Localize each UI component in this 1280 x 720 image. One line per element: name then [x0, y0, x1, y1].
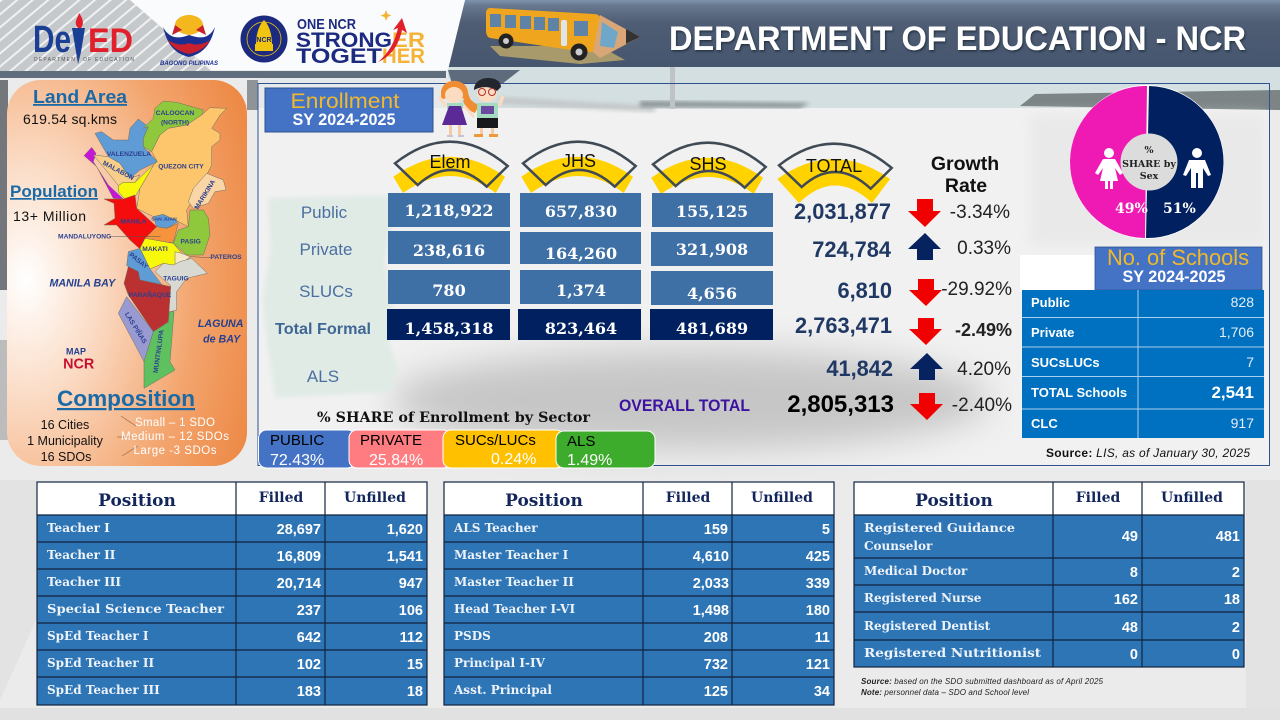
pie chart: share by sex: 49% [1115, 201, 1148, 217]
map labels: de BAY [203, 334, 241, 346]
logo: One NCR Stronger Together: STRONG [296, 29, 392, 52]
source note: schools: Source: LIS, as of January 30, 2025 [1046, 446, 1250, 460]
panel: number of schools [1020, 245, 1264, 438]
table: master teachers and school heads: 208 [704, 630, 728, 646]
table: health and guidance positions: Position [915, 491, 993, 511]
map labels: MAP [66, 346, 86, 356]
pie chart: share by sex: % [1144, 145, 1154, 156]
growth rate heading [931, 153, 999, 197]
overall total label: OVERALL TOTAL [619, 396, 750, 415]
table: teacher positions: Teacher II [47, 548, 116, 562]
enrollment totals: 41,842 [826, 356, 893, 381]
table: master teachers and school heads: 2,033 [693, 576, 729, 592]
table: teacher positions: 18 [407, 684, 423, 700]
table: teacher positions: Unfilled [344, 490, 406, 506]
map labels: TAGUIG [163, 275, 189, 282]
table: master teachers and school heads: 1,498 [693, 603, 729, 619]
table: teacher positions [37, 482, 427, 705]
enrollment totals [794, 199, 893, 381]
growth rate heading: Growth [931, 153, 999, 175]
enrollment table: Elem column: 780 [432, 281, 466, 300]
enrollment totals: 724,784 [812, 237, 891, 262]
header banner [0, 0, 1280, 78]
enrollment table: JHS column: 657,830 [545, 202, 617, 221]
enrollment table: SHS column: 155,125 [676, 202, 748, 221]
table: master teachers and school heads: 5 [822, 522, 830, 538]
column heading: SHS [651, 143, 766, 194]
table: teacher positions: 947 [399, 576, 423, 592]
table: master teachers and school heads: 180 [806, 603, 830, 619]
share of enrollment bar: PRIVATE [360, 432, 422, 449]
enrollment table: Elem column: 1,458,318 [404, 319, 494, 338]
table: health and guidance positions: Registered Guidance [864, 521, 1015, 535]
map labels: MALABON [101, 160, 135, 182]
panel: number of schools: 917 [1231, 415, 1254, 431]
enrollment table: Elem column [387, 193, 510, 340]
table: master teachers and school heads: 4,610 [693, 549, 729, 565]
map labels: CALOOCAN [156, 110, 194, 117]
logo: One NCR Stronger Together: TOGET [296, 45, 382, 68]
table: teacher positions: 642 [297, 630, 321, 646]
map labels: LAS PIÑAS [123, 310, 150, 346]
table: health and guidance positions: 8 [1130, 565, 1138, 581]
panel: enrollment heading: Enrollment [290, 90, 400, 113]
table: master teachers and school heads: 159 [704, 522, 728, 538]
enrollment table: Elem column: 1,218,922 [404, 201, 494, 220]
composition counts: 16 Cities [41, 418, 89, 432]
table: master teachers and school heads: 121 [806, 657, 830, 673]
enrollment table: SHS column: 321,908 [676, 240, 748, 259]
enrollment table: JHS column [518, 193, 641, 340]
pie chart: share by sex: SHARE by [1122, 159, 1176, 170]
panel: number of schools: Public [1031, 295, 1070, 310]
land area heading: Land Area [33, 87, 128, 107]
table: master teachers and school heads: PSDS [454, 629, 491, 643]
pie chart: share by sex [1070, 85, 1224, 239]
composition heading: Composition [57, 386, 195, 411]
growth arrows [908, 199, 943, 420]
map labels: PASAY [128, 252, 149, 271]
SDO size classes [117, 416, 229, 457]
logo: DepED [33, 13, 134, 64]
panel: number of schools: Private [1031, 325, 1074, 340]
icon: pencil school bus [486, 8, 640, 64]
table: teacher positions: Teacher III [47, 575, 121, 589]
share of enrollment bar: 25.84% [369, 452, 423, 469]
growth rates: -3.34% [950, 202, 1010, 223]
pie chart: share by sex: 51% [1163, 201, 1196, 217]
icon: female [1095, 148, 1123, 189]
map labels: MANDALUYONG [58, 233, 111, 240]
growth rate heading: Rate [945, 175, 987, 197]
table: teacher positions: Filled [259, 490, 304, 506]
logo: One NCR Stronger Together: HER [382, 45, 425, 68]
logo: DepED: DEPARTMENT OF EDUCATION [34, 57, 134, 63]
panel: number of schools: TOTAL Schools [1031, 385, 1127, 400]
table: master teachers and school heads: Master Teacher I [454, 548, 569, 562]
panel: number of schools: 1,706 [1219, 324, 1254, 340]
map labels: PASIG [181, 238, 201, 245]
panel: number of schools: 2,541 [1211, 383, 1254, 402]
table: master teachers and school heads: Master Teacher II [454, 575, 574, 589]
map labels [49, 110, 243, 373]
enrollment table: JHS column: 1,374 [556, 281, 606, 300]
table: teacher positions: SpEd Teacher III [47, 683, 160, 697]
growth rates [941, 202, 1012, 416]
share of enrollment heading: % SHARE of Enrollment by Sector [317, 410, 591, 426]
table: master teachers and school heads: Asst. Principal [453, 683, 552, 697]
table: teacher positions: 1,541 [387, 549, 423, 565]
SDO size classes: Medium – 12 SDOs [121, 431, 229, 443]
table: health and guidance positions: 2 [1232, 565, 1240, 581]
table: health and guidance positions: Registered Dentist [864, 619, 991, 633]
map labels: MUNTINLUPA [153, 329, 166, 373]
table: master teachers and school heads: 11 [815, 630, 830, 646]
source note: personnel: Note: personnel data – SDO and School level [861, 688, 1029, 697]
table: health and guidance positions: Unfilled [1161, 490, 1223, 506]
table: teacher positions: 102 [297, 657, 321, 673]
table: teacher positions: 183 [297, 684, 321, 700]
table: health and guidance positions [854, 482, 1244, 667]
panel: land area map [7, 80, 247, 466]
table: health and guidance positions: Registered Nurse [864, 591, 982, 605]
column heading: JHS [521, 142, 636, 193]
map labels: VALENZUELA [107, 151, 151, 158]
table: master teachers and school heads: Filled [666, 490, 711, 506]
table: master teachers and school heads: 125 [704, 684, 728, 700]
share of enrollment bar: SUCs/LUCs [455, 432, 536, 449]
title: DEPARTMENT OF EDUCATION - NCR [669, 20, 1246, 58]
table: health and guidance positions: Counselor [864, 539, 933, 553]
table: teacher positions: 16,809 [277, 549, 321, 565]
row labels: Public [301, 203, 348, 222]
column heading: TOTAL [777, 144, 892, 203]
logo: DepEd NCR seal: NCR [256, 37, 272, 44]
row labels: SLUCs [299, 282, 353, 301]
table: teacher positions: 106 [399, 603, 423, 619]
table: teacher positions: Teacher I [47, 521, 110, 535]
enrollment table: JHS column: 164,260 [545, 244, 617, 263]
panel: number of schools: CLC [1031, 416, 1058, 431]
composition counts [27, 418, 104, 464]
table: master teachers and school heads: 339 [806, 576, 830, 592]
table: master teachers and school heads: Unfilled [751, 490, 813, 506]
table: teacher positions: 15 [407, 657, 423, 673]
table: health and guidance positions: Filled [1076, 490, 1121, 506]
enrollment totals: 6,810 [837, 278, 892, 303]
column heading: JHS: JHS [562, 151, 596, 171]
map labels: MANILA [120, 219, 146, 226]
table: master teachers and school heads: 34 [814, 684, 830, 700]
enrollment table: SHS column: 481,689 [676, 319, 748, 338]
column heading: SHS: SHS [689, 154, 727, 174]
table: health and guidance positions: 0 [1130, 647, 1138, 663]
row labels: Private [300, 240, 352, 259]
logo: One NCR Stronger Together: ONE NCR [297, 16, 356, 33]
map labels: SAN JUAN [151, 217, 177, 223]
main enrollment frame [258, 84, 1270, 466]
logo: One NCR Stronger Together [296, 10, 425, 68]
table: health and guidance positions: 49 [1122, 529, 1138, 545]
table: teacher positions: 20,714 [277, 576, 321, 592]
table: health and guidance positions: 18 [1224, 592, 1240, 608]
table: teacher positions: 28,697 [277, 522, 321, 538]
growth rates: -2.49% [955, 320, 1012, 340]
map labels: NCR [63, 356, 95, 372]
overall total value: 2,805,313 [787, 391, 894, 418]
table: teacher positions: SpEd Teacher II [47, 656, 155, 670]
source note: personnel [861, 677, 1104, 697]
logo: DepED: ED [88, 22, 133, 60]
source note: personnel: Source: based on the SDO submitted dashboard as of April 2025 [861, 677, 1104, 686]
table: teacher positions: Position [98, 491, 176, 511]
table: health and guidance positions: 2 [1232, 620, 1240, 636]
table: teacher positions: SpEd Teacher I [47, 629, 149, 643]
growth rates: -29.92% [941, 279, 1012, 300]
panel: number of schools: 828 [1231, 294, 1254, 310]
panel: enrollment heading [265, 88, 433, 132]
composition counts: 1 Municipality [27, 434, 104, 448]
map labels: (NORTH) [161, 119, 189, 126]
SDO size classes: Large -3 SDOs [134, 445, 217, 457]
panel: number of schools: SUCsLUCs [1031, 355, 1100, 370]
share of enrollment bar [258, 430, 655, 469]
composition counts: 16 SDOs [41, 450, 91, 464]
table: master teachers and school heads: 425 [806, 549, 830, 565]
table: health and guidance positions: 0 [1232, 647, 1240, 663]
SDO size classes: Small – 1 SDO [135, 417, 215, 429]
row labels [275, 203, 371, 386]
share of enrollment bar: 72.43% [270, 452, 324, 469]
table: health and guidance positions: 162 [1114, 592, 1138, 608]
row labels: Total Formal [275, 321, 371, 338]
share of enrollment bar: 1.49% [567, 452, 612, 469]
table: health and guidance positions: Medical Doctor [864, 564, 968, 578]
table: teacher positions: 112 [400, 630, 423, 646]
table: teacher positions: Special Science Teacher [47, 602, 225, 616]
logo: Bagong Pilipinas [160, 15, 218, 67]
growth rates: 4.20% [957, 359, 1011, 380]
panel: enrollment heading: SY 2024-2025 [292, 110, 396, 129]
enrollment table: SHS column: 4,656 [687, 284, 737, 303]
table: health and guidance positions: 481 [1216, 529, 1240, 545]
logo: One NCR Stronger Together: ER [392, 29, 425, 52]
logo: DepEd NCR seal [240, 16, 288, 62]
pie chart: share by sex: Sex [1140, 171, 1159, 182]
logo: DepED: De [33, 19, 71, 61]
map labels: MARIKINA [194, 179, 217, 211]
table: health and guidance positions: 48 [1122, 620, 1138, 636]
logo: Bagong Pilipinas: BAGONG PILIPINAS [160, 61, 218, 67]
map labels: LAGUNA [198, 318, 243, 330]
table: master teachers and school heads [444, 482, 834, 705]
enrollment table: Elem column: 238,616 [413, 241, 485, 260]
panel: number of schools: 7 [1246, 354, 1254, 370]
map labels: PARAÑAQUE [129, 290, 172, 299]
growth rates: 0.33% [957, 238, 1011, 259]
map labels: MAKATI [142, 246, 168, 253]
map labels: PATEROS [210, 254, 242, 261]
enrollment totals: 2,031,877 [794, 199, 891, 224]
map of NCR [84, 101, 227, 388]
map labels: QUEZON CITY [158, 163, 204, 170]
enrollment totals: 2,763,471 [795, 313, 892, 338]
enrollment table: JHS column: 823,464 [545, 319, 617, 338]
column heading: TOTAL: TOTAL [806, 156, 862, 176]
enrollment table: SHS column [650, 193, 773, 340]
table: teacher positions: 1,620 [387, 522, 423, 538]
population value: 13+ Million [13, 208, 86, 224]
share of enrollment bar: 0.24% [491, 451, 536, 468]
table: teacher positions: 237 [297, 603, 321, 619]
row labels: ALS [307, 367, 339, 386]
panel: number of schools: SY 2024-2025 [1122, 268, 1226, 286]
table: health and guidance positions: Registered Nutritionist [864, 646, 1042, 660]
land area value: 619.54 sq.kms [23, 111, 117, 127]
table: master teachers and school heads: Head Teacher I-VI [454, 602, 575, 616]
table: master teachers and school heads: Principal I-IV [454, 656, 546, 670]
share of enrollment bar: ALS [567, 433, 595, 450]
panel: number of schools: No. of Schools [1107, 245, 1249, 270]
column heading: Elem [393, 142, 508, 193]
icon: male [1183, 148, 1211, 188]
table: master teachers and school heads: ALS Teacher [453, 521, 538, 535]
map labels: MANILA BAY [49, 277, 116, 289]
table: master teachers and school heads: 732 [704, 657, 728, 673]
growth rates: -2.40% [952, 395, 1012, 416]
share of enrollment bar: PUBLIC [270, 432, 324, 449]
column heading: Elem: Elem [429, 152, 471, 172]
table: master teachers and school heads: Position [505, 491, 583, 511]
icon: school kids [439, 78, 503, 137]
population heading: Population [10, 182, 98, 201]
